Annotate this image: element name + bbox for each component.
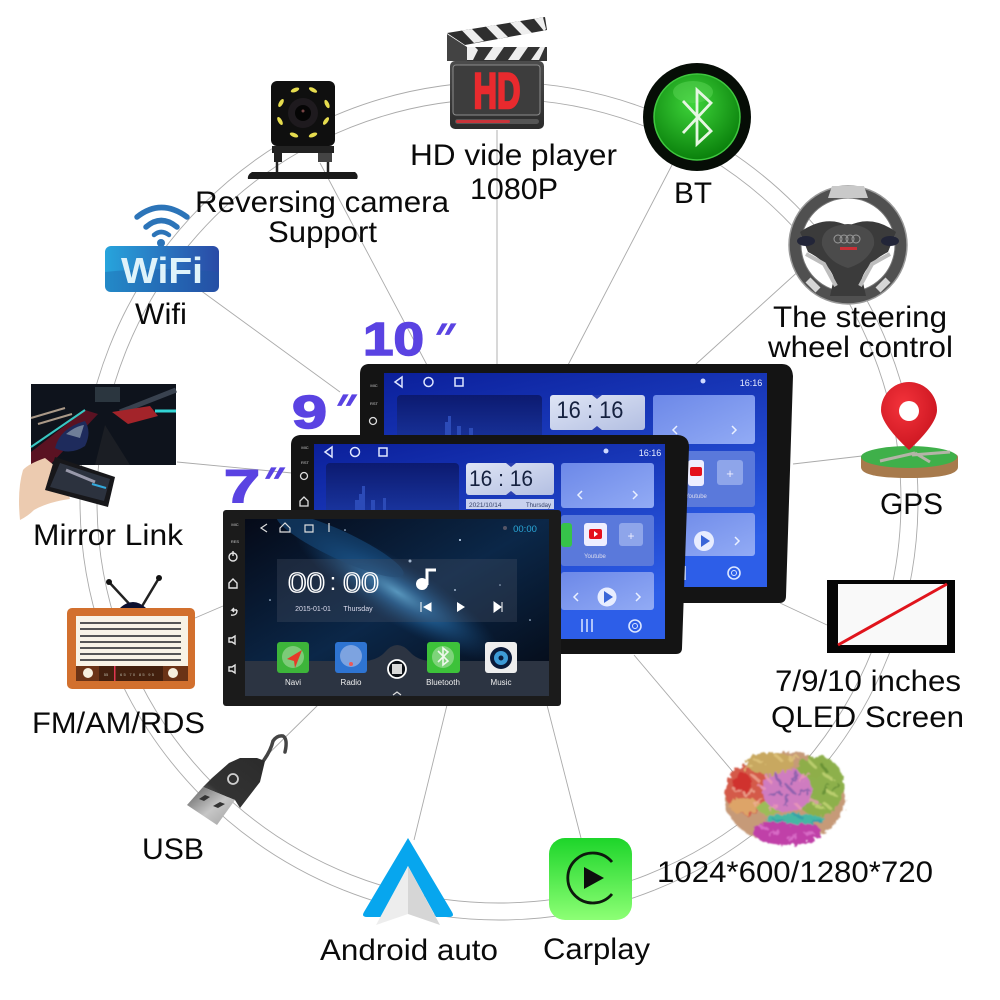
panel: 9 inch head unit: 16 : 16 <box>469 466 533 491</box>
size label: 7 inch: 7 <box>224 460 260 512</box>
panel: 9 inch head unit: 16:16 <box>639 448 661 458</box>
panel: 9 inch head unit: MIC <box>301 445 309 450</box>
panel: 10 inch head unit <box>360 364 793 603</box>
icon: Bluetooth button <box>643 63 751 171</box>
panel: 10 inch head unit: Youtube <box>685 494 708 500</box>
panel: 7 inch head unit: Navi <box>285 678 301 687</box>
icon: HD video clapperboard: HD <box>474 63 520 119</box>
label: Wifi: Wifi <box>135 298 187 331</box>
icon: wifi badge: WiFi <box>121 250 203 291</box>
size label: 10 inch: 10 <box>363 313 424 365</box>
icon: steering wheel <box>789 186 907 304</box>
icon: aspect ratio screen <box>827 580 955 653</box>
size label: 7 inch: " <box>244 457 294 509</box>
panel: 9 inch head unit: RST <box>301 460 310 465</box>
size label: 10 inch <box>363 313 465 365</box>
label: Carplay: Carplay <box>543 933 650 966</box>
icon: retro radio <box>67 575 195 689</box>
label: GPS: GPS <box>880 488 943 521</box>
panel: 10 inch head unit: 16 : 16 <box>556 397 624 424</box>
label: The steering: The steering <box>773 301 947 334</box>
icon: Android Auto <box>363 838 453 925</box>
panel: 7 inch head unit: MIC <box>231 522 239 527</box>
label: Reversing camera: Reversing camera <box>195 186 449 219</box>
label: 1080P: 1080P <box>470 173 558 206</box>
panel: 9 inch head unit <box>291 435 689 654</box>
panel: 7 inch head unit: RES <box>231 539 239 544</box>
panel: 10 inch head unit: MIC <box>370 383 378 388</box>
label: FM/AM/RDS: FM/AM/RDS <box>32 707 205 740</box>
icon: color burst ball <box>725 752 845 845</box>
panel: 9 inch head unit: + <box>627 529 635 543</box>
icon: wifi badge <box>105 208 219 292</box>
panel: 7 inch head unit: Radio <box>341 678 362 687</box>
icon: CarPlay <box>549 838 632 920</box>
panel: 10 inch head unit: 16:16 <box>740 378 762 388</box>
panel: 7 inch head unit: Bluetooth <box>426 678 460 687</box>
panel: 9 inch head unit: 2021/10/14 <box>469 502 502 509</box>
label: USB: USB <box>142 833 204 866</box>
panel: 7 inch head unit: 2015-01-01 <box>295 606 331 613</box>
label: BT: BT <box>674 177 712 210</box>
icon: GPS pin on map base <box>861 382 958 478</box>
panel: 10 inch head unit: RST <box>370 401 379 406</box>
icon: USB plug <box>187 736 286 825</box>
icon: HD video clapperboard <box>447 17 547 129</box>
panel: 7 inch head unit <box>223 503 561 706</box>
label: Mirror Link: Mirror Link <box>33 519 184 552</box>
icon: retro radio: 65 70 85 95 <box>120 672 155 677</box>
size label: 9 inch: 9 <box>292 386 327 438</box>
panel: 7 inch head unit: : <box>330 569 336 596</box>
label: Support: Support <box>268 216 378 249</box>
panel: 7 inch head unit: 00:00 <box>513 524 537 535</box>
size label: 10 inch: " <box>415 313 465 365</box>
panel: 7 inch head unit: Thursday <box>343 606 373 613</box>
label: QLED Screen: QLED Screen <box>771 701 964 734</box>
label: wheel control: wheel control <box>767 331 953 364</box>
label: 7/9/10 inches: 7/9/10 inches <box>775 665 961 698</box>
label: Android auto: Android auto <box>320 934 498 967</box>
panel: 7 inch head unit: Music <box>491 678 511 687</box>
panel: 9 inch head unit: Thursday <box>526 503 551 509</box>
label: HD vide player: HD vide player <box>410 139 617 172</box>
size label: 9 inch: " <box>316 384 366 436</box>
icon: retro radio: 55 <box>104 672 109 677</box>
size label: 7 inch <box>224 457 294 512</box>
icon: reversing camera <box>248 81 358 179</box>
label: resolution: 1024*600/1280*720 <box>657 856 933 889</box>
icon: mirror link screen and phone <box>19 384 176 520</box>
panel: 7 inch head unit: 00 <box>343 567 379 598</box>
panel: 9 inch head unit: Youtube <box>584 554 607 560</box>
panel: 7 inch head unit: 00 <box>288 567 325 598</box>
panel: 10 inch head unit: + <box>726 466 734 481</box>
size label: 9 inch <box>292 384 366 438</box>
